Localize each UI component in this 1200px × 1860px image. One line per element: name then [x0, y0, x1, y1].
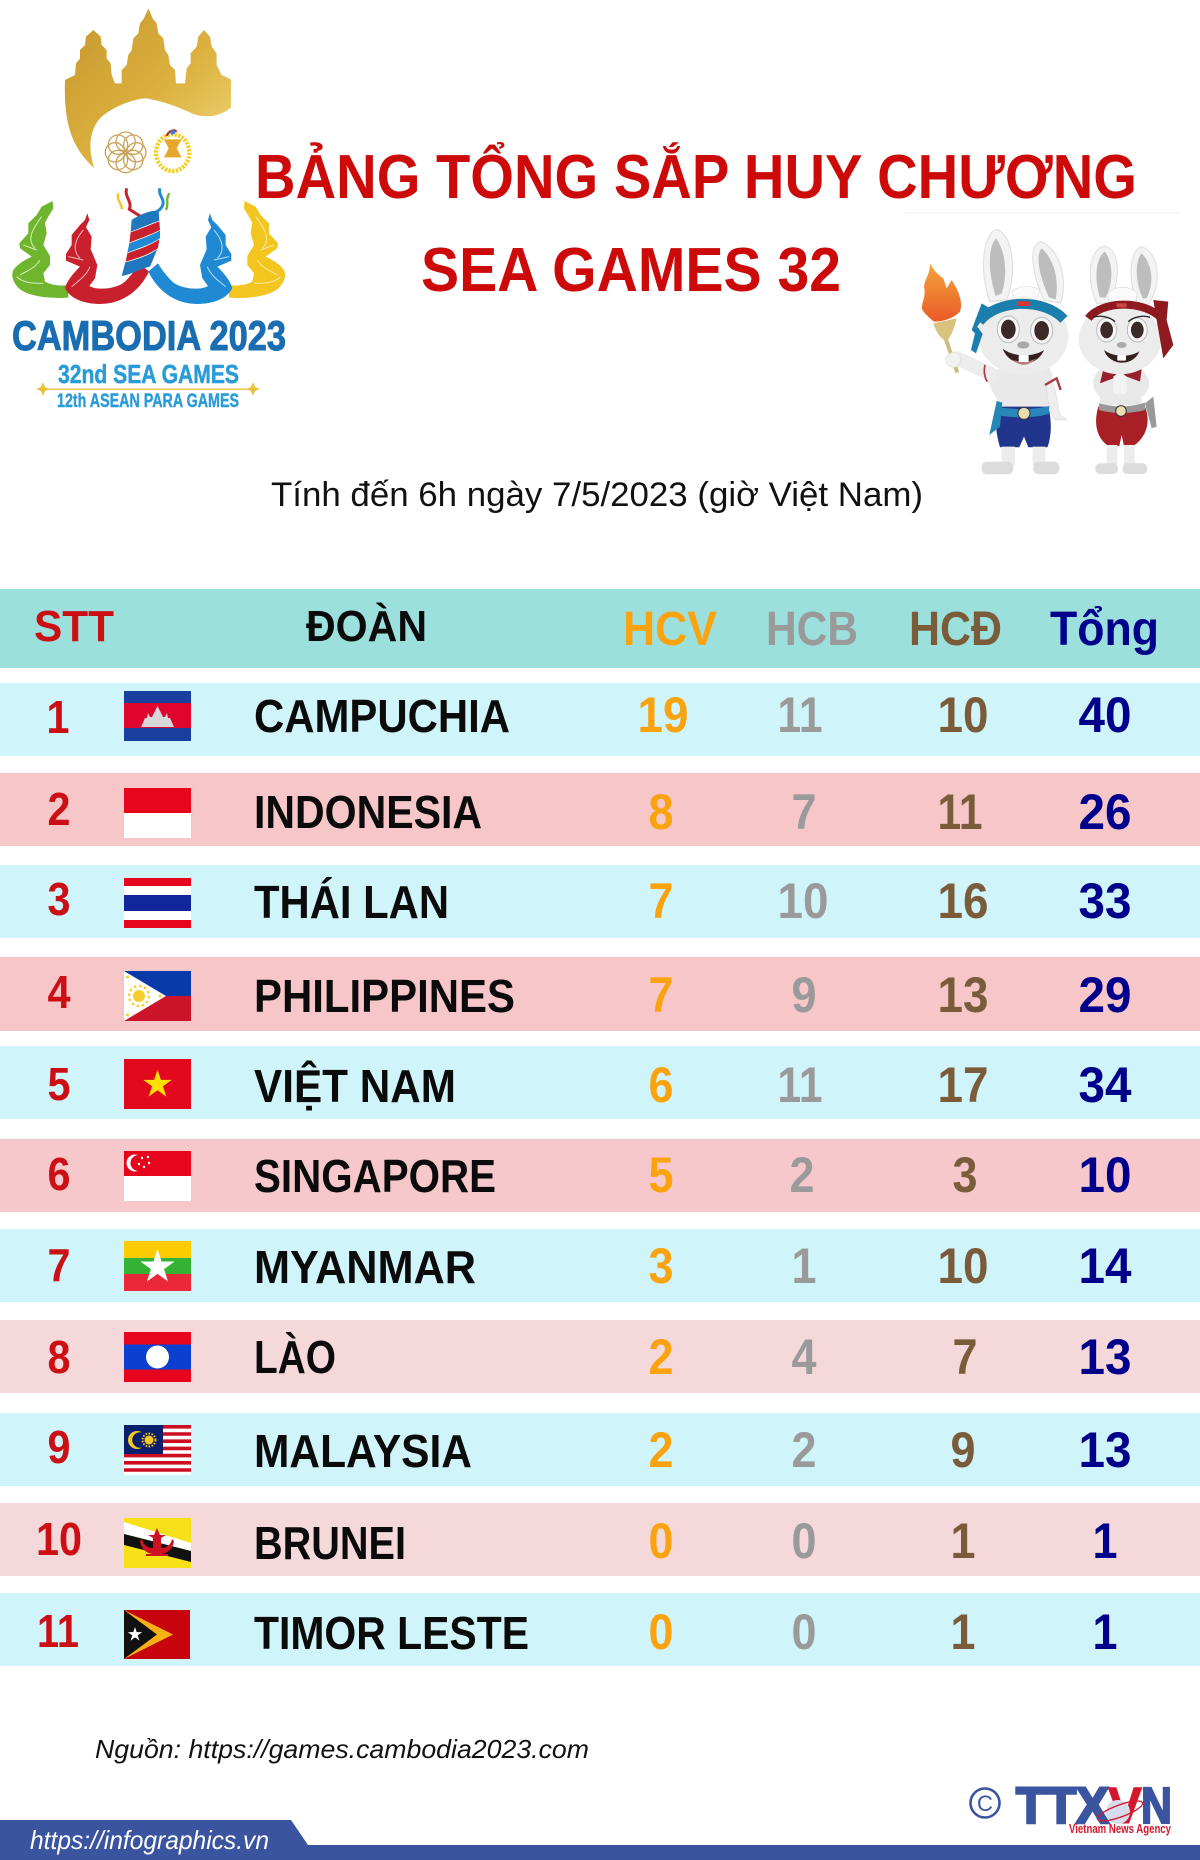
- row 8: Lào: 13: [1078, 1329, 1132, 1385]
- footer bar: [0, 1820, 1200, 1860]
- flag: Vietnam: [124, 1059, 191, 1109]
- row 10: Brunei: 0: [792, 1513, 816, 1569]
- row 2: Indonesia: 26: [1078, 784, 1132, 840]
- row 8: Lào: 4: [792, 1329, 817, 1385]
- flag: Brunei: [124, 1518, 191, 1568]
- table header: HCV: [623, 603, 717, 656]
- row 7: Myanmar: 14: [1078, 1238, 1132, 1294]
- row 5: Việt Nam: 34: [1078, 1057, 1132, 1113]
- row 10: Brunei: 1: [950, 1513, 976, 1569]
- row 8: Lào: 2: [648, 1329, 674, 1385]
- row 9: Malaysia: 13: [1078, 1422, 1132, 1478]
- row 4: Philippines: 7: [648, 967, 674, 1023]
- row 5: Việt Nam: 5: [48, 1058, 70, 1110]
- row 2: Indonesia: [0, 773, 1200, 846]
- row 7: Myanmar: [0, 1229, 1200, 1302]
- row 10: Brunei: 10: [36, 1513, 82, 1565]
- row 10: Brunei: [0, 1503, 1200, 1576]
- row 1: Campuchia: [0, 683, 1200, 756]
- row 4: Philippines: PHILIPPINES: [254, 970, 515, 1022]
- title: [255, 142, 1137, 305]
- row 2: Indonesia: 7: [792, 784, 816, 840]
- row 7: Myanmar: 7: [48, 1239, 70, 1291]
- row 11: Timor Leste: [0, 1593, 1200, 1666]
- row 1: Campuchia: CAMPUCHIA: [254, 690, 510, 742]
- row 6: Singapore: 5: [648, 1147, 674, 1203]
- flag: Cambodia: [124, 691, 191, 741]
- table header: Tổng: [1050, 603, 1159, 656]
- row 4: Philippines: [0, 957, 1200, 1031]
- title: SEA GAMES 32: [421, 236, 841, 305]
- row 11: Timor Leste: 1: [950, 1604, 976, 1660]
- row 6: Singapore: 10: [1078, 1147, 1132, 1203]
- row 1: Campuchia: 10: [938, 687, 988, 743]
- icon: golden crown: [12, 8, 285, 304]
- icon: female rabbit: [1079, 246, 1173, 474]
- flag: Singapore: [124, 1151, 191, 1201]
- illustration: rabbit mascots: [922, 229, 1173, 474]
- icon: yellow naga: [229, 201, 285, 298]
- row 4: Philippines: 4: [48, 966, 71, 1018]
- row 8: Lào: [0, 1320, 1200, 1393]
- row 9: Malaysia: 9: [950, 1422, 976, 1478]
- row 3: Thái Lan: 3: [48, 873, 70, 925]
- table header: ĐOÀN: [306, 601, 427, 651]
- logo text: 32nd SEA Games: 32nd SEA GAMES: [58, 359, 239, 389]
- flag: Indonesia: [124, 788, 191, 838]
- row 11: Timor Leste: TIMOR LESTE: [254, 1607, 529, 1659]
- logo text: Cambodia 2023: CAMBODIA 2023: [12, 312, 286, 359]
- row 9: Malaysia: 2: [648, 1422, 674, 1478]
- row 2: Indonesia: 11: [938, 784, 982, 840]
- row 5: Việt Nam: 6: [648, 1057, 674, 1113]
- row 10: Brunei: 1: [1092, 1513, 1118, 1569]
- row 9: Malaysia: MALAYSIA: [254, 1425, 472, 1477]
- logo: TTXVN: TTX: [1016, 1777, 1109, 1834]
- logo: Cambodia 2023 SEA Games emblem: [12, 8, 286, 412]
- row 1: Campuchia: 19: [638, 687, 688, 743]
- row 8: Lào: LÀO: [254, 1331, 336, 1383]
- row 4: Philippines: 29: [1078, 967, 1132, 1023]
- icon: male rabbit with torch: [922, 229, 1069, 474]
- logo: TTXVN: C: [977, 1791, 993, 1816]
- row 3: Thái Lan: THÁI LAN: [254, 876, 449, 928]
- row 9: Malaysia: [0, 1413, 1200, 1486]
- row 5: Việt Nam: 17: [938, 1057, 988, 1113]
- table header: STT: [34, 602, 114, 651]
- row 1: Campuchia: 11: [778, 687, 822, 743]
- table header: [0, 589, 1200, 668]
- icon: games flower: [105, 132, 146, 173]
- row 3: Thái Lan: 10: [778, 873, 828, 929]
- row 3: Thái Lan: 33: [1078, 873, 1132, 929]
- row 8: Lào: 8: [48, 1331, 70, 1383]
- row 3: Thái Lan: 16: [938, 873, 988, 929]
- row 6: Singapore: [0, 1139, 1200, 1212]
- logo: TTXVN: N: [1141, 1777, 1172, 1834]
- row 1: Campuchia: 1: [46, 691, 70, 743]
- row 11: Timor Leste: 1: [1092, 1604, 1118, 1660]
- row 5: Việt Nam: VIỆT NAM: [254, 1060, 456, 1112]
- row 2: Indonesia: 8: [648, 784, 674, 840]
- logo: TTXVN: V: [1108, 1777, 1142, 1834]
- row 10: Brunei: 0: [648, 1513, 674, 1569]
- row 1: Campuchia: 40: [1078, 687, 1132, 743]
- icon: green naga: [12, 201, 68, 298]
- icon: blue naga: [148, 213, 232, 304]
- logo ornament line: [36, 382, 260, 396]
- flag: Timor Leste: [124, 1610, 190, 1659]
- flag: Thailand: [124, 878, 191, 928]
- row 11: Timor Leste: 0: [792, 1604, 816, 1660]
- row 11: Timor Leste: 0: [648, 1604, 674, 1660]
- row 4: Philippines: 13: [938, 967, 988, 1023]
- row 10: Brunei: BRUNEI: [254, 1517, 406, 1569]
- row 7: Myanmar: MYANMAR: [254, 1241, 476, 1293]
- row 5: Việt Nam: 11: [778, 1057, 822, 1113]
- logo: TTXVN: [970, 1777, 1172, 1836]
- row 6: Singapore: 3: [952, 1147, 978, 1203]
- icon: ASEAN para emblem: [156, 130, 189, 171]
- row 7: Myanmar: 3: [648, 1238, 674, 1294]
- title: BẢNG TỔNG SẮP HUY CHƯƠNG: [255, 142, 1137, 212]
- flag: Philippines: [124, 971, 191, 1021]
- row 2: Indonesia: 2: [48, 783, 70, 835]
- row 7: Myanmar: 10: [938, 1238, 988, 1294]
- row 11: Timor Leste: 11: [37, 1605, 79, 1657]
- row 6: Singapore: 6: [48, 1148, 70, 1200]
- row 9: Malaysia: 9: [48, 1421, 70, 1473]
- table header: HCB: [766, 603, 858, 656]
- subtitle: Tính đến 6h ngày 7/5/2023 (giờ Việt Nam): [271, 476, 923, 514]
- row 5: Việt Nam: [0, 1046, 1200, 1119]
- row 2: Indonesia: INDONESIA: [254, 786, 482, 838]
- row 6: Singapore: SINGAPORE: [254, 1150, 496, 1202]
- footer link: https://infographics.vn: [30, 1825, 269, 1855]
- icon: red naga: [65, 213, 149, 304]
- flag: Myanmar: [124, 1241, 191, 1291]
- table header: HCĐ: [909, 603, 1002, 656]
- icon: twisted naga tails: [118, 188, 169, 276]
- flag: Laos: [124, 1332, 191, 1382]
- logo text: 12th ASEAN Para Games: 12th ASEAN PARA GAMES: [57, 391, 239, 412]
- source note: Nguồn: https://games.cambodia2023.com: [95, 1734, 589, 1764]
- row 7: Myanmar: 1: [792, 1238, 816, 1294]
- row 6: Singapore: 2: [790, 1147, 814, 1203]
- row 3: Thái Lan: 7: [648, 873, 674, 929]
- flag: Malaysia: [124, 1425, 191, 1475]
- row 9: Malaysia: 2: [792, 1422, 816, 1478]
- row 3: Thái Lan: [0, 865, 1200, 938]
- row 8: Lào: 7: [952, 1329, 978, 1385]
- row 4: Philippines: 9: [792, 967, 816, 1023]
